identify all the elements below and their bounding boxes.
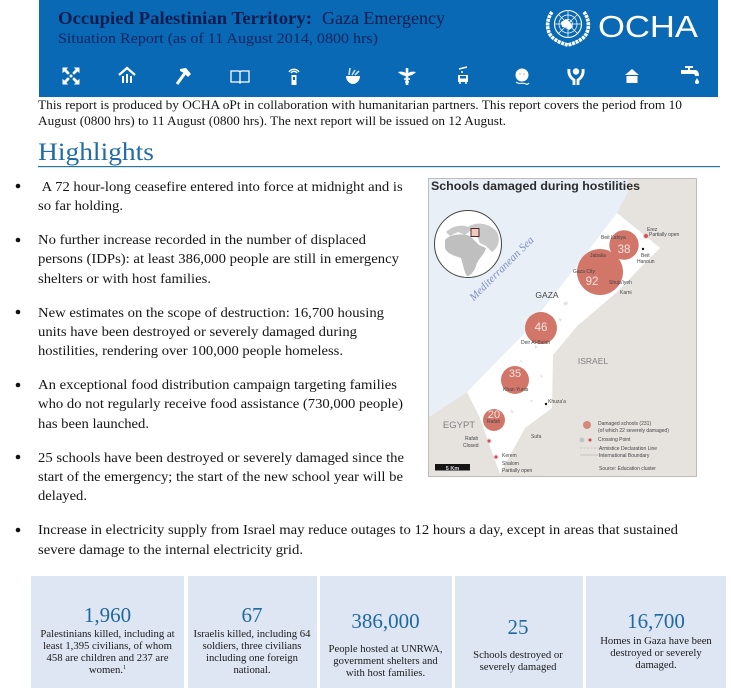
place labels: Partially open: [502, 468, 533, 474]
icon: water tap: [681, 66, 699, 84]
report subtitle: Situation Report (as of 11 August 2014, 0800 hrs): [58, 31, 378, 47]
heading: Highlights: Highlights: [38, 139, 154, 166]
map: Gaza Strip: [467, 213, 660, 474]
map legend: Damaged schools (231): [598, 421, 651, 427]
intro text: [38, 98, 682, 128]
place labels: Khan Yunis: [503, 387, 529, 393]
crossing point markers: [487, 234, 648, 459]
stat: people hosted: 386,000: [351, 609, 420, 633]
bullet: schools: 25 schools have been destroyed or severely damaged since the: [38, 451, 404, 466]
school damage circles: [483, 230, 639, 431]
icon: nutrition baby: [516, 68, 529, 84]
place labels: Karni: [620, 290, 632, 296]
bullet: food distribution: has been launched.: [38, 417, 149, 432]
map legend: Armistice Declaration Line: [599, 446, 657, 452]
map title: Schools damaged during hostilities: [431, 181, 640, 193]
bullet: food distribution: [16, 378, 403, 432]
stat: Israelis killed: including one foreign: [206, 652, 299, 664]
highlights bullet list: [16, 180, 678, 558]
place labels: Rafah: [465, 436, 479, 442]
bullet: displaced persons: [16, 233, 399, 287]
stat: Palestinians killed: [31, 576, 184, 688]
place labels: Gaza City: [573, 269, 595, 275]
circle values: 20: [488, 409, 500, 421]
scale bar: [435, 464, 470, 472]
place labels: Beit: [641, 253, 650, 259]
stat: homes: Homes in Gaza have been: [600, 635, 712, 647]
icon: health caduceus: [398, 68, 416, 85]
icon: UN emblem: [548, 10, 588, 45]
circle values: 46: [535, 322, 547, 334]
intro text: August (0800 hrs) to 11 August (0800 hrs). The next report will be issued on 12 August.: [38, 114, 506, 128]
map region labels: EGYPT: [443, 420, 475, 431]
map region labels: GAZA: [535, 290, 559, 300]
place labels: Sufa: [531, 434, 542, 440]
bullet: displaced persons: shelters or with host families.: [38, 272, 211, 287]
stat: Palestinians killed: women.: [89, 664, 123, 676]
stat: Israelis killed: Israelis killed, including 64: [194, 628, 311, 640]
place labels: Partially open: [649, 232, 680, 238]
stat: schools: [455, 576, 583, 688]
header banner: [39, 0, 718, 97]
inset globe: [434, 210, 502, 278]
stat: homes: [586, 576, 726, 688]
report title: Occupied Palestinian Territory:: [58, 8, 312, 28]
place labels: Khuza'a: [548, 399, 566, 405]
stat: Israelis killed: national.: [233, 664, 271, 676]
icon: phone with signal: [289, 69, 299, 85]
map region labels: ISRAEL: [578, 356, 608, 366]
place labels: Closed: [463, 443, 479, 449]
map legend: (of which 22 severely damaged): [598, 428, 669, 434]
bullet: destruction: [16, 306, 384, 359]
icon: logistics truck and plane: [458, 67, 468, 84]
bullet: ceasefire: A 72 hour-long ceasefire entered into force at midnight and is: [42, 180, 403, 195]
stat: schools: Schools destroyed or: [473, 649, 563, 661]
stat: Palestinians killed: least 1,395 civilians, of whom: [43, 640, 173, 652]
place labels: [463, 227, 680, 474]
bullet: destruction: hostilities, rendering over 100,000 people homeless.: [38, 344, 343, 359]
logo wordmark: OCHA: [598, 10, 699, 44]
map legend: Source: Education cluster: [599, 466, 656, 472]
stat panels: [31, 576, 726, 688]
circle values: 35: [509, 368, 521, 380]
icon: protection hands: [569, 68, 583, 85]
place labels: Kerem: [502, 453, 517, 459]
place labels: Rafah: [487, 419, 501, 425]
place labels: Jabalia: [590, 253, 606, 259]
bullet: ceasefire: so far holding.: [38, 199, 123, 214]
icon: shelter with family: [119, 68, 135, 83]
bullet: displaced persons: No further increase recorded in the number of displaced: [38, 233, 366, 248]
OCHA logo: [548, 10, 699, 45]
place labels: Hanoun: [637, 259, 655, 265]
label: Mediterranean Sea: Mediterranean Sea: [467, 234, 537, 304]
bullet: schools: start of the emergency; the start of the new school year will be: [38, 470, 403, 485]
place labels: Shuja'iyeh: [609, 280, 632, 286]
bullet: destruction: New estimates on the scope of destruction: 16,700 housing: [38, 306, 384, 321]
circle values: [488, 244, 630, 421]
place labels: Deir Al-Balah: [521, 340, 550, 346]
bullet: food distribution: An exceptional food distribution campaign targeting families: [38, 378, 397, 393]
place labels: Beit Lahiya: [601, 235, 626, 241]
map legend: Crossing Point: [598, 437, 631, 443]
bullet: electricity: severe damage to the internal electricity grid.: [38, 543, 303, 558]
scale bar: 5 Km: [446, 466, 459, 472]
icon: open book: [231, 71, 249, 83]
stat: Israelis killed: soldiers, three civilians: [203, 640, 301, 652]
report title: [58, 8, 445, 28]
stat: Palestinians killed: 458 are children and 237 are: [47, 652, 169, 664]
map legend: International Boundary: [599, 453, 650, 459]
bullet: displaced persons: persons (IDPs): at least 386,000 people are still in emergency: [38, 252, 399, 267]
bullet: destruction: units have been destroyed or severely damaged during: [38, 325, 357, 340]
stat: people hosted: with host families.: [346, 667, 425, 679]
map legend: [580, 421, 669, 472]
place labels: Erez: [647, 227, 658, 233]
stat: Israelis killed: [188, 576, 317, 688]
bullet: schools: [16, 451, 404, 504]
stat: Palestinians killed: 1: [123, 665, 126, 671]
stat: people hosted: People hosted at UNRWA,: [328, 643, 442, 655]
place labels: Shalom: [502, 461, 519, 467]
circle values: 92: [586, 276, 598, 288]
bullet: food distribution: who do not regularly receive food assistance (730,000 people): [38, 397, 403, 412]
stat: schools: severely damaged: [480, 661, 557, 673]
cluster icon row: [63, 66, 699, 85]
icon: food bowl: [346, 68, 360, 84]
stat: Palestinians killed: Palestinians killed, including at: [40, 628, 175, 640]
map region labels: [443, 290, 608, 431]
bullet: electricity: Increase in electricity supply from Israel may reduce outages to 12 hours a day, except in areas that sustained: [38, 523, 678, 538]
stat: homes: 16,700: [627, 609, 685, 633]
stat: people hosted: government shelters and: [333, 655, 438, 667]
icon: hammer: [177, 68, 191, 84]
bullet: ceasefire: [16, 180, 403, 214]
stat: homes: damaged.: [635, 659, 677, 671]
stat: Israelis killed: 67: [242, 603, 262, 627]
stat: homes: destroyed or severely: [610, 647, 702, 659]
intro text: This report is produced by OCHA oPt in collaboration with humanitarian partners. This report covers the period from 10: [38, 98, 682, 112]
stat: schools: 25: [508, 615, 528, 639]
bullet: schools: delayed.: [38, 489, 87, 504]
icon: house: [625, 69, 639, 83]
panel: schools damaged map: [428, 178, 696, 476]
circle values: 38: [618, 244, 630, 256]
icon: coordination arrows: [63, 68, 79, 84]
report title: Gaza Emergency: [322, 8, 445, 28]
bullet: electricity: [16, 523, 678, 558]
stat: people hosted: [320, 576, 452, 688]
stat: Palestinians killed: 1,960: [84, 603, 131, 627]
